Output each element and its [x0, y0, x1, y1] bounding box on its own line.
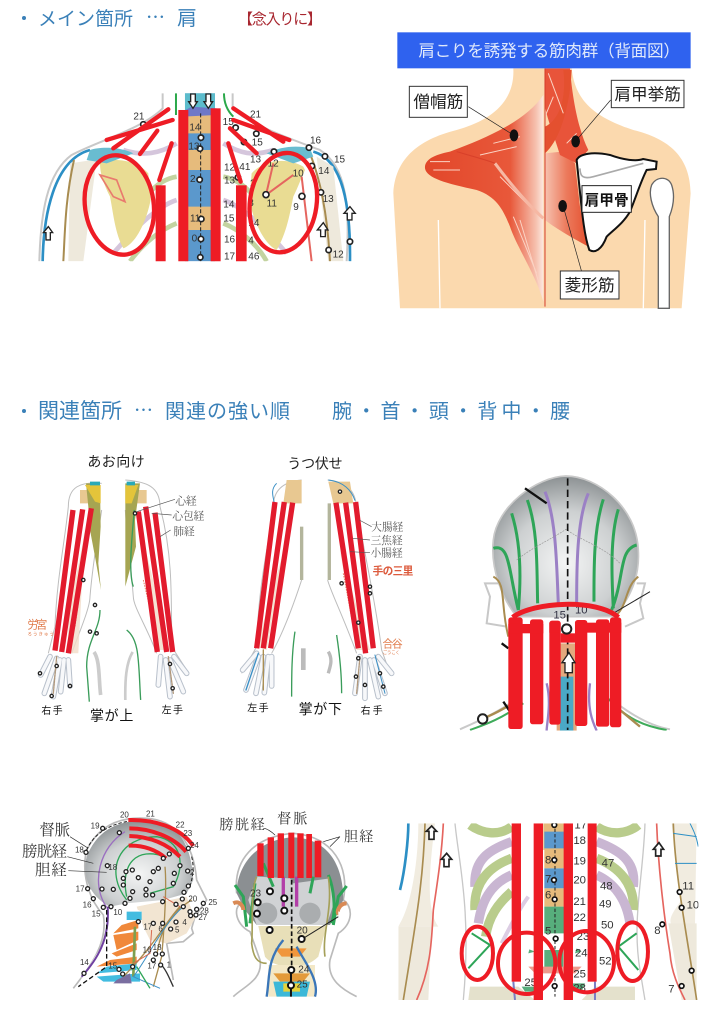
- numbers: 6: [545, 889, 551, 901]
- numbers: 20: [573, 874, 586, 886]
- acupoints and numbers: 3: [248, 198, 254, 209]
- heading: related areas: ⋯: [134, 401, 153, 422]
- numbers: 17: [143, 922, 153, 931]
- diagram: back of head and neck: [460, 476, 670, 731]
- acupoints and numbers: 13: [224, 175, 236, 186]
- white arrows: [43, 94, 355, 240]
- acupoints and numbers: 4: [248, 235, 254, 246]
- heading: main area: 肩: [177, 8, 197, 30]
- ear outlines: [485, 583, 645, 627]
- head silhouette outline: [73, 818, 207, 988]
- numbers: 23: [577, 931, 589, 943]
- caption: palm up title: あお向け: [87, 454, 145, 470]
- spine and pelvis: [468, 823, 635, 1000]
- red treatment bars: [512, 823, 597, 1002]
- numbers: 52: [599, 955, 612, 967]
- acupoints and numbers: 12: [333, 249, 344, 260]
- meridian labels right arm: 三焦経: [371, 534, 403, 547]
- acupoints and numbers: 16: [310, 135, 322, 146]
- label: levator scapulae: 肩甲挙筋: [614, 85, 681, 104]
- acupoint name labels: [27, 564, 414, 656]
- numbers: 25: [297, 979, 308, 990]
- skull: [493, 476, 638, 617]
- heading: related areas: 関連箇所: [38, 400, 122, 423]
- acupoints and numbers: 15: [334, 154, 346, 165]
- acupoints and numbers: 9: [293, 202, 299, 213]
- acupoints: [552, 823, 694, 988]
- caption: face down title: うつ伏せ: [287, 455, 343, 471]
- meridian labels right arm: 大腸経: [371, 521, 404, 534]
- numbers: 8: [545, 854, 551, 866]
- acupoints and numbers: 15: [252, 137, 263, 148]
- rib cage: [470, 825, 638, 943]
- acupoint name labels: ごうこく: [383, 649, 400, 656]
- numbers: 18: [153, 943, 162, 952]
- numbers: 47: [602, 858, 614, 870]
- numbers: 4: [182, 918, 187, 927]
- numbers: 23: [183, 829, 193, 838]
- acupoints and numbers: 41: [239, 162, 251, 173]
- heading note: carefully: 【念入りに】: [238, 11, 322, 28]
- acupoints and numbers: 13: [188, 141, 200, 152]
- humerus: [650, 178, 673, 308]
- ribs: [113, 143, 287, 261]
- label: trapezius: [409, 86, 467, 117]
- heading: main area: ⋯: [146, 8, 165, 29]
- acupoints and numbers: 16: [224, 235, 236, 246]
- numbers: 7: [545, 874, 551, 886]
- arm bones and meridians: [398, 823, 698, 1000]
- numbers: 19: [91, 822, 100, 831]
- acupoint name labels: 合谷: [383, 638, 403, 651]
- acupoints and numbers: [133, 109, 353, 262]
- acupoints and numbers: 0: [192, 233, 198, 244]
- acupoint name labels: 手の三里: [373, 564, 414, 577]
- numbers: 25: [573, 969, 586, 981]
- acupoints and numbers: 14: [189, 123, 201, 134]
- numbers: 22: [176, 820, 185, 829]
- numbers: 7: [668, 984, 675, 996]
- numbers: 19: [573, 855, 586, 867]
- heading: related areas: 腕・首・頭・背中・腰: [332, 400, 570, 423]
- numbers: 1: [167, 961, 172, 970]
- meridian lines: [78, 820, 193, 988]
- numbers: [250, 889, 310, 990]
- meridian labels: [219, 810, 373, 846]
- diagram: front of head: [219, 810, 373, 997]
- acupoints and numbers: 15: [223, 214, 235, 225]
- acupoints and numbers: 2: [250, 179, 256, 190]
- numbers: 24: [575, 948, 588, 960]
- meridian labels: 胆経: [344, 830, 373, 846]
- acupoints and numbers: 15: [223, 117, 234, 128]
- acupoints and numbers: 13: [250, 155, 262, 166]
- acupoints and numbers: 14: [248, 218, 260, 229]
- numbers: 14: [80, 958, 89, 967]
- acupoint name labels: ろうきゅう: [27, 630, 54, 637]
- numbers: 11: [682, 880, 694, 892]
- arrows: [426, 826, 664, 867]
- diagram: side of head: [22, 810, 218, 988]
- numbers and acupoints: 15: [553, 609, 566, 621]
- acupoints: [254, 888, 305, 988]
- numbers: 5: [175, 926, 180, 935]
- acupoints on arms: [38, 490, 385, 698]
- numbers: 10: [113, 908, 123, 917]
- numbers: 16: [83, 900, 92, 909]
- numbers: 17: [76, 885, 85, 894]
- diagram: lower back: [398, 819, 699, 1002]
- acupoints and numbers: 13: [323, 194, 334, 205]
- numbers: 25: [208, 898, 218, 907]
- acupoints and numbers: 11: [267, 199, 277, 210]
- numbers: 24: [190, 841, 199, 850]
- acupoints and numbers: 11: [190, 213, 201, 224]
- numbers: 6: [158, 925, 163, 934]
- numbers: [524, 819, 699, 996]
- acupoints and numbers: 14: [223, 199, 235, 210]
- numbers: 21: [573, 896, 586, 908]
- hand captions: [41, 701, 383, 724]
- skull: [237, 837, 343, 925]
- numbers: 22: [573, 912, 586, 924]
- numbers: 50: [601, 919, 614, 931]
- meridian labels left arm: 心経: [175, 494, 197, 507]
- numbers: 8: [654, 925, 661, 937]
- meridian labels: 膀胱経: [219, 816, 265, 833]
- heading: main area: [22, 8, 197, 30]
- red treatment bars: [508, 604, 621, 729]
- diagram: arms meridians: [27, 454, 414, 724]
- red arm treatment bars: [55, 502, 373, 653]
- acupoints and numbers: 12: [224, 163, 236, 174]
- hand captions: 右手: [361, 704, 383, 717]
- arm outlines: [48, 480, 390, 673]
- numbers: 48: [600, 880, 613, 892]
- label: scapula: [582, 186, 631, 212]
- hand captions: 右手: [41, 704, 63, 717]
- numbers and acupoints: 10: [575, 604, 588, 616]
- heading: related areas: 関連の強い順: [165, 400, 290, 423]
- acupoints: [82, 826, 205, 976]
- numbers: 27: [198, 913, 208, 922]
- label: meridian names side: 督脈: [39, 821, 70, 839]
- skull and face: [85, 821, 195, 943]
- muscle fibre lines: [430, 137, 543, 287]
- meridian labels: 督脈: [277, 810, 307, 827]
- label: trapezius: 僧帽筋: [413, 92, 463, 111]
- numbers: 20: [188, 895, 198, 904]
- acupoint name labels: 労宮: [27, 618, 47, 632]
- diagram: muscle groups causing shoulder stiffness: [393, 32, 691, 308]
- numbers and acupoints: [478, 604, 588, 724]
- numbers: 28: [573, 983, 586, 995]
- numbers: 21: [146, 810, 155, 819]
- numbers: 5: [545, 925, 551, 937]
- numbers: 15: [92, 910, 101, 919]
- numbers: 25: [524, 977, 537, 989]
- acupoints and numbers: 21: [250, 109, 262, 120]
- green meridians and pelvic bones: [75, 480, 355, 702]
- numbers: 17: [574, 819, 587, 831]
- label: meridian names side: 胆経: [35, 862, 67, 879]
- arm bones: [68, 159, 97, 261]
- numbers: 18: [108, 863, 118, 872]
- red treatment arcs: [128, 820, 193, 858]
- numbers: 24: [298, 965, 310, 976]
- meridian labels left arm: 心包経: [172, 509, 205, 522]
- numbers: 10: [687, 899, 699, 911]
- acupoints and numbers: 14: [318, 166, 330, 177]
- numbers: 18: [573, 835, 586, 847]
- label: rhomboid: [560, 271, 619, 299]
- hands: [41, 650, 392, 698]
- meridian labels right arm: 小腸経: [371, 547, 403, 560]
- spine: [183, 93, 217, 261]
- meridian labels left arm: 肺経: [173, 525, 195, 538]
- heading: related areas: [22, 400, 570, 423]
- arrow: [562, 653, 575, 673]
- hand captions: 掌が上: [90, 708, 133, 724]
- green meridian marks: [468, 933, 638, 970]
- numbers: 23: [250, 889, 262, 900]
- numbers: 20: [120, 810, 129, 819]
- acupoints and numbers: 21: [133, 111, 145, 122]
- body silhouette: [393, 68, 691, 308]
- red treatment marks: [78, 108, 323, 263]
- numbers: 17: [147, 961, 157, 970]
- label: scapula: 肩甲骨: [585, 192, 629, 209]
- numbers: 16: [143, 946, 152, 955]
- acupoint on neck: [562, 624, 571, 634]
- skull meridians: [493, 478, 650, 730]
- arm bones and torso colour: [68, 480, 370, 653]
- trapezius muscle: [425, 95, 543, 302]
- acupoints and numbers: 10: [293, 169, 304, 180]
- title banner: 肩こりを誘発する筋肉群（背面図）: [418, 42, 680, 61]
- meridian labels left arm: [137, 494, 205, 538]
- diagram: shoulder back meridians: [39, 93, 355, 263]
- red treatment ellipses: [462, 922, 648, 994]
- numbers: 28: [200, 906, 209, 915]
- scapula: [577, 153, 657, 251]
- leader dots and lines: [468, 100, 611, 272]
- hand captions: 左手: [162, 703, 183, 716]
- acupoints and numbers: 12: [268, 159, 279, 170]
- cervical vertebrae: [77, 905, 142, 987]
- title banner: [397, 32, 691, 68]
- heading: main area: メイン箇所: [38, 8, 133, 30]
- scapulae: [100, 160, 151, 248]
- meridian labels right arm: [350, 520, 404, 560]
- label: rhomboid: 菱形筋: [565, 276, 615, 295]
- acupoints and numbers: 46: [248, 251, 260, 262]
- hand captions: 左手: [247, 702, 269, 715]
- label: levator scapulae: [611, 80, 684, 108]
- numbers: 20: [297, 925, 308, 936]
- levator and rhomboid muscles: [545, 152, 588, 247]
- numbers: 18: [75, 846, 84, 855]
- label: meridian names side: 膀胱経: [22, 843, 67, 861]
- hand captions: 掌が下: [299, 701, 342, 717]
- neck: [460, 643, 670, 731]
- head meridians: [233, 828, 347, 997]
- head outline: [233, 833, 357, 997]
- label: meridian names side: [22, 821, 107, 879]
- lower face and neck: [258, 926, 327, 997]
- acupoints and numbers: 2: [190, 174, 196, 185]
- red treatment bars: [257, 833, 321, 878]
- numbers: [75, 810, 218, 970]
- numbers: 49: [599, 898, 612, 910]
- acupoints and numbers: 17: [224, 251, 236, 262]
- numbers: 2: [190, 868, 195, 877]
- body outline and meridians: [39, 93, 350, 261]
- numbers: 15: [108, 961, 118, 970]
